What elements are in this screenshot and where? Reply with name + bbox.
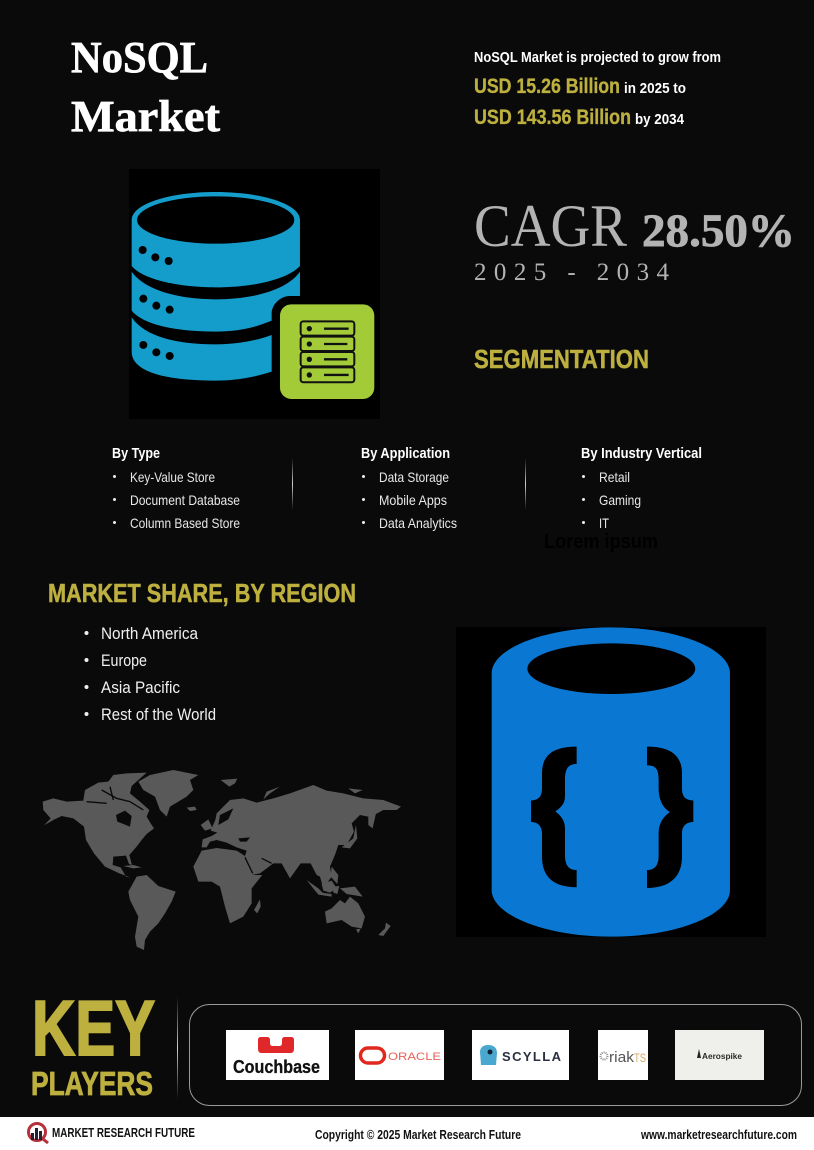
segment list: by type: Column Based Store [130, 515, 240, 531]
logo: Market Research Future [28, 1124, 195, 1143]
title: NoSQL [71, 33, 208, 82]
title: Market [71, 92, 220, 141]
segment list: by industry vertical: Gaming [599, 492, 641, 508]
logo: Oracle [355, 1030, 444, 1080]
heading: key players: PLAYERS [31, 1065, 153, 1102]
market projection text: in 2025 to [624, 80, 686, 97]
region list: Asia Pacific [101, 678, 180, 697]
market projection text: NoSQL Market is projected to grow from [474, 49, 721, 66]
segment list: by application: Data Storage [379, 469, 449, 485]
segment list: by type [112, 445, 240, 531]
segment list: by industry vertical: By Industry Vertical [581, 445, 702, 462]
logo: Oracle: ORACLE [388, 1051, 441, 1063]
logo: Market Research Future: MARKET RESEARCH FUTURE [52, 1126, 195, 1140]
icon: blue document database cylinder [456, 627, 766, 937]
segment list: by application: Mobile Apps [379, 492, 447, 508]
segment list: by application: Data Analytics [379, 515, 457, 531]
segment list: by type: By Type [112, 445, 160, 462]
CAGR stat: CAGR [474, 193, 627, 259]
heading: segmentation: SEGMENTATION [474, 344, 649, 374]
segment list: by industry vertical: IT [599, 515, 609, 531]
logo: Scylla: SCYLLA [502, 1049, 562, 1064]
segment list: by type: Document Database [130, 492, 240, 508]
footer [0, 1117, 814, 1150]
market projection text: USD 143.56 Billion [474, 106, 631, 129]
logo: Scylla [472, 1030, 569, 1080]
segment list: by industry vertical: Retail [599, 469, 630, 485]
key players panel [190, 1004, 802, 1106]
segment list: by type: Key-Value Store [130, 469, 215, 485]
logo: Riak TS: TS [634, 1051, 646, 1065]
logo: Couchbase [226, 1030, 329, 1080]
heading: key players: KEY [32, 984, 155, 1072]
segment list: by application: By Application [361, 445, 450, 462]
CAGR stat: 28.50% [642, 205, 795, 257]
logo: Aerospike: Aerospike [702, 1051, 742, 1061]
CAGR stat: 2025 - 2034 [474, 259, 670, 286]
region list [84, 624, 216, 724]
icon: database with server badge [129, 169, 380, 419]
title [71, 33, 220, 141]
segment list: by industry vertical [581, 445, 702, 531]
region list: Europe [101, 651, 147, 670]
logo: Riak TS [598, 1030, 648, 1080]
logo: Couchbase: Couchbase [233, 1057, 320, 1077]
world map [43, 770, 401, 950]
market projection text: USD 15.26 Billion [474, 75, 620, 98]
market projection text: by 2034 [635, 111, 685, 128]
market projection text [474, 49, 721, 129]
segment list: by application [361, 445, 457, 531]
heading: market share by region: MARKET SHARE, BY REGION [48, 578, 356, 608]
logo: Aerospike [675, 1030, 764, 1080]
region list: North America [101, 624, 198, 643]
CAGR stat [474, 193, 795, 286]
logo: Riak TS: riak [609, 1049, 635, 1066]
heading: key players [31, 984, 155, 1102]
copyright: Copyright © 2025 Market Research Future [315, 1128, 521, 1142]
region list: Rest of the World [101, 705, 216, 724]
hidden dark placeholder text: Lorem ipsum [544, 531, 658, 553]
